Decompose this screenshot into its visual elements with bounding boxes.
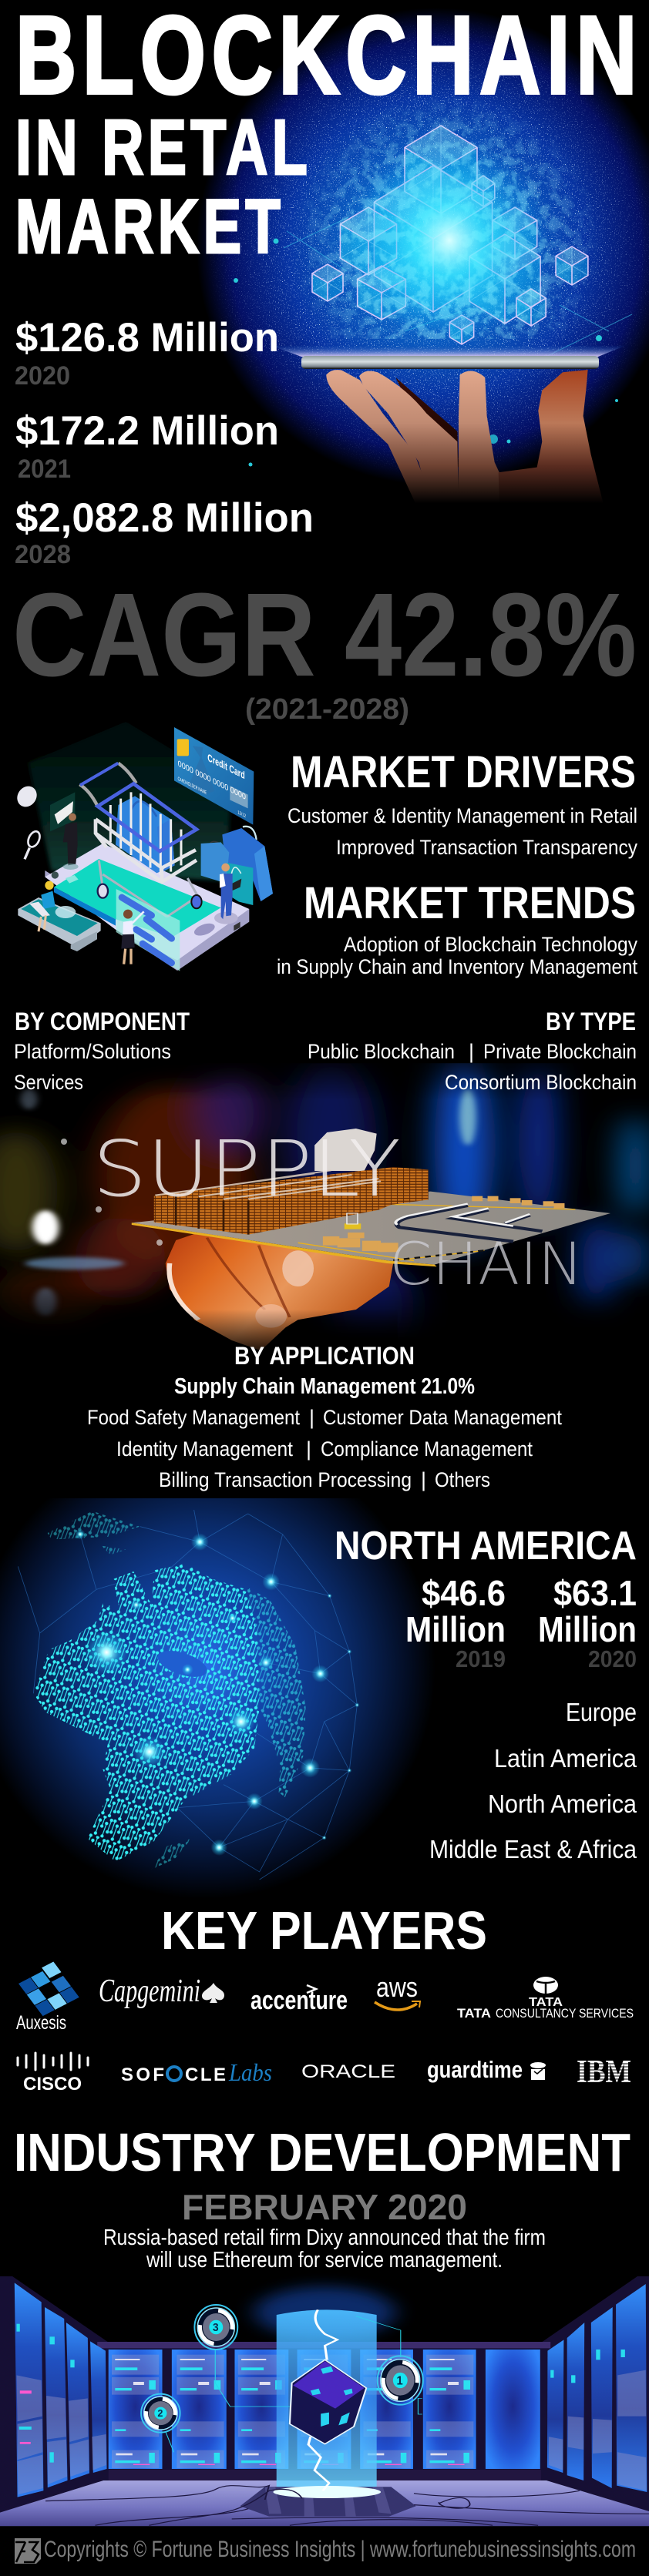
value 2019: $46.6 (422, 1573, 506, 1613)
market trends section (277, 878, 637, 978)
forklift (345, 1213, 361, 1229)
warehouse platform (132, 1167, 610, 1266)
credit card: 0000 0000 0000 0000 (178, 760, 246, 802)
icon: fortune business insights logo (15, 2538, 41, 2564)
cables (45, 2486, 649, 2525)
back wall racks (109, 2350, 541, 2480)
region: north america: North America (488, 1789, 637, 1818)
stat 2028: $2,082.8 Million (15, 495, 314, 541)
description line 1: Russia-based retail firm Dixy announced that the firm (103, 2225, 546, 2250)
photo lettering: SUPPLY: SUPPLY (92, 1124, 401, 1214)
by application block (87, 1342, 562, 1491)
phone base side (45, 870, 249, 971)
pedestal (240, 2486, 416, 2517)
application row 3: Others (435, 1468, 490, 1491)
photo lettering: CHAIN: CHAIN (389, 1229, 583, 1298)
stat 2021: $172.2 Million (15, 408, 279, 454)
hud circle 3 (194, 2305, 237, 2350)
value 2020: 2020 (588, 1645, 637, 1672)
hero blue glow background (154, 8, 649, 516)
connector lines (166, 2316, 422, 2452)
shopping bags (201, 827, 273, 905)
phone light sheen (270, 345, 627, 357)
logo: sofocle labs: CLE (185, 2064, 226, 2085)
separator bar: | (469, 1040, 474, 1063)
left side racks (15, 2283, 107, 2497)
title line 2: IN RETAL (15, 105, 311, 191)
map glow background (0, 1498, 439, 1907)
application row 2: | (306, 1437, 311, 1461)
circuit traces: islands (44, 1510, 198, 1874)
application row 3: Billing Transaction Processing (159, 1468, 412, 1491)
footer (15, 2537, 636, 2564)
logo: tata consultancy services (457, 1977, 634, 2021)
circuit traces: fading east side (247, 1588, 305, 1797)
logo: auxesis: Auxesis (16, 2012, 66, 2034)
by component block (14, 1008, 190, 1094)
year 2020: 2020 (15, 361, 70, 391)
circuit traces: main continent (35, 1564, 259, 1860)
logo: tata consultancy services: TATA (529, 1996, 563, 2009)
application row 2 (116, 1437, 533, 1461)
year 2021: 2021 (18, 454, 71, 484)
network lines behind cubes (284, 217, 632, 360)
value 2020: $63.1 (553, 1573, 637, 1613)
hud circle 1 (378, 2356, 423, 2405)
item: services: Services (14, 1071, 83, 1094)
item: public blockchain: Public Blockchain (308, 1040, 455, 1063)
icon: hand holding phone (326, 370, 605, 511)
logo: ibm: IBM (577, 2054, 631, 2090)
right side racks (547, 2284, 647, 2492)
hazard stripe (393, 1250, 484, 1260)
credit card: Credit Card (207, 751, 245, 781)
application row 1: | (309, 1406, 314, 1429)
teal screen (54, 859, 221, 937)
logo: oracle: ORACLE (301, 2061, 395, 2082)
hud circle 2 (141, 2394, 180, 2433)
floating icons: piggy, magnifier, chat (13, 783, 75, 859)
conveyors (395, 1204, 542, 1242)
money stack with seated woman (18, 881, 101, 951)
logo: aws: aws (376, 1971, 418, 2003)
warehouse shelves (154, 1167, 429, 1235)
panel: glowing circuit world map (0, 1498, 439, 1907)
cyan floating dots (234, 239, 618, 467)
title (15, 0, 643, 269)
heading: by application: BY APPLICATION (234, 1342, 415, 1370)
credit card (174, 727, 254, 825)
logo: accenture: accenture (251, 1986, 348, 2015)
value 2019 (405, 1573, 506, 1672)
crystal core cube (290, 2360, 366, 2444)
translucent chat panel with woman (116, 889, 180, 971)
panel: supply chain photo illustration (0, 1038, 647, 1356)
application row 2: Compliance Management (321, 1437, 533, 1461)
logo: capgemini: Capgemini (99, 1974, 200, 2009)
date: february 2020: FEBRUARY 2020 (182, 2187, 467, 2227)
glow behind column (254, 2286, 395, 2338)
market drivers section (288, 747, 637, 859)
item: platform/solutions: Platform/Solutions (14, 1040, 171, 1063)
bright network nodes (75, 1529, 359, 1856)
floor (0, 2480, 649, 2526)
value 2019: Million (405, 1609, 506, 1649)
value 2020: Million (538, 1609, 637, 1649)
panel: hero illustration with glowing cubes over phone (199, 11, 649, 501)
region: latin america: Latin America (494, 1744, 637, 1773)
market size stats (15, 315, 314, 569)
panel: server room illustration with crystal core (0, 2276, 649, 2526)
phone base top (45, 844, 249, 961)
phone details (52, 871, 240, 938)
credit card: 12/12 (237, 810, 246, 819)
heading: key players: KEY PLAYERS (161, 1900, 487, 1961)
gulf gap glow (155, 1645, 210, 1682)
region: europe: Europe (566, 1698, 637, 1726)
credit card: CARDHOLDER NAME (178, 776, 207, 796)
person: man in suit (63, 813, 79, 870)
phone body (301, 356, 599, 369)
star speckle (210, 20, 649, 470)
by type block (308, 1008, 637, 1094)
leading application share: Supply Chain Management 21.0% (174, 1374, 475, 1399)
year 2028: 2028 (15, 540, 71, 569)
green backdrop wall (29, 722, 231, 880)
title line 3: MARKET (15, 183, 284, 269)
logo: tata consultancy services: TATA (457, 2006, 491, 2021)
blurred photo backdrop (0, 1063, 649, 1333)
network mesh lines (18, 1510, 357, 1880)
CAGR period: (2021-2028) (245, 693, 409, 726)
pallets of boxes (323, 1196, 564, 1252)
heading: by type: BY TYPE (546, 1008, 636, 1035)
description line 2: will use Ethereum for service management. (146, 2248, 503, 2272)
fingertip behind shelves (314, 1129, 377, 1171)
panel: shopping cart isometric illustration (13, 722, 273, 971)
value 2020 (538, 1573, 637, 1672)
heading: by component: BY COMPONENT (15, 1008, 190, 1035)
logo: sofocle labs: SOF (121, 2064, 164, 2085)
application row 2: Identity Management (116, 1437, 293, 1461)
translucent energy column (277, 2309, 377, 2487)
person: man in overalls (214, 864, 241, 924)
orange hand under platform (166, 1129, 398, 1356)
logo: sofocle labs: Labs (228, 2058, 272, 2086)
icon: isometric glowing cubes (293, 92, 601, 344)
sparkle dots (61, 1139, 163, 1246)
shopping cart (79, 763, 202, 917)
application row 1: Customer Data Management (323, 1406, 562, 1429)
logo: cisco: CISCO (23, 2074, 82, 2095)
application row 1 (87, 1406, 562, 1429)
industry development block (14, 2122, 631, 2272)
logo: cisco (18, 2053, 88, 2095)
back wall top strip (97, 2342, 550, 2348)
side frames (0, 2276, 649, 2525)
logo: sofocle labs (121, 2058, 272, 2086)
stat 2020: $126.8 Million (15, 315, 279, 361)
value 2019: 2019 (456, 1645, 506, 1672)
logo: auxesis (16, 1962, 80, 2034)
application row 1: Food Safety Management (87, 1406, 300, 1429)
logo: guardtime: guardtime (427, 2056, 523, 2083)
north america stats block (335, 1524, 637, 1863)
application row 3: | (421, 1468, 426, 1491)
key players logos (16, 1962, 634, 2095)
lightning bolt (308, 2309, 338, 2490)
